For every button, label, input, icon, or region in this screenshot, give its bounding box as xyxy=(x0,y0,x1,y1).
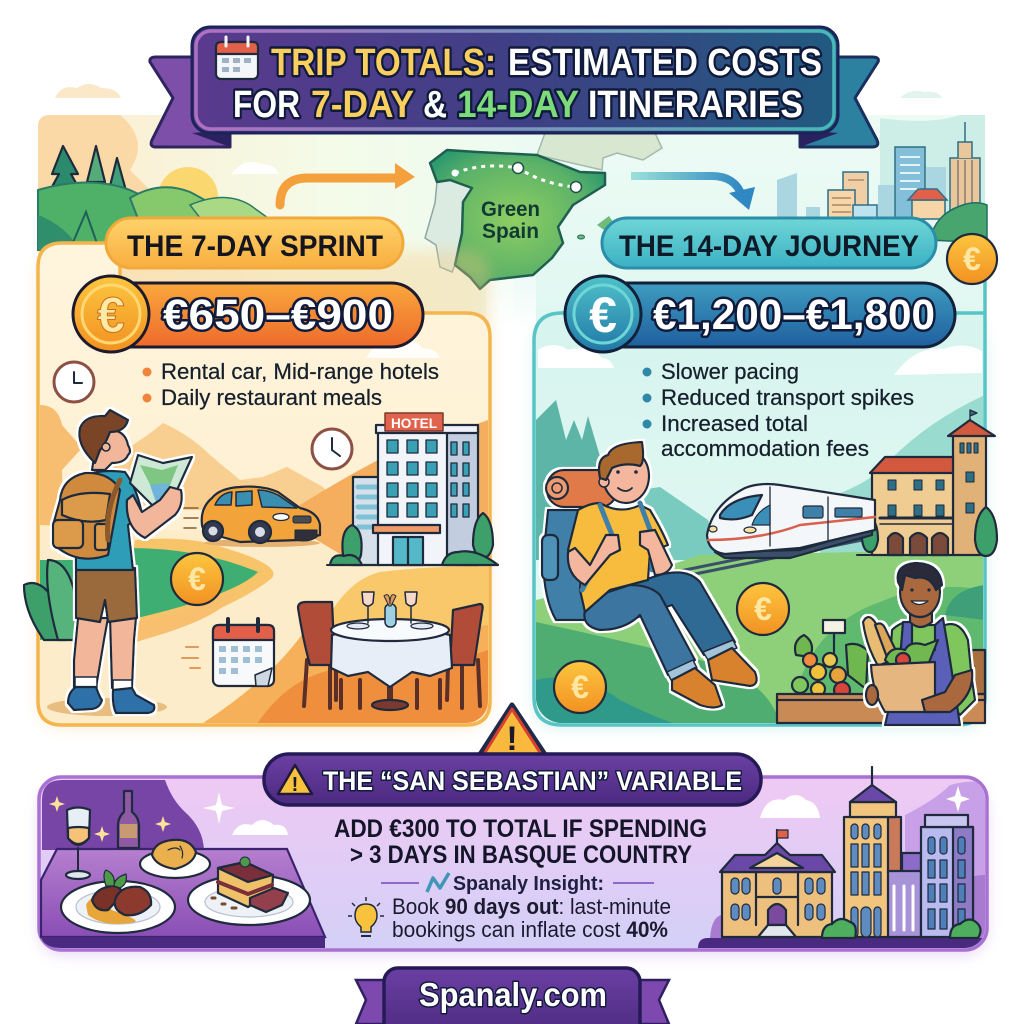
price: 7-day: €650–€900 xyxy=(163,291,393,339)
icon: spanaly logo xyxy=(427,873,449,892)
callout text: Spanaly Insight: xyxy=(453,873,604,895)
spanish building xyxy=(857,410,997,556)
scene: hills xyxy=(40,339,488,727)
pill: 7-day heading xyxy=(106,218,403,268)
bullets: 14-day: Increased total xyxy=(661,411,808,436)
clock xyxy=(54,362,94,402)
warning triangle: ! xyxy=(506,720,518,758)
title banner xyxy=(150,27,878,147)
price: 14-day xyxy=(565,276,955,352)
hills xyxy=(38,182,235,250)
icon: calendar xyxy=(216,37,258,79)
title text: ITINERARIES xyxy=(588,84,803,126)
hotel sign xyxy=(385,413,443,431)
sparkles and clouds xyxy=(232,795,820,835)
callout text: ADD €300 TO TOTAL IF SPENDING xyxy=(334,815,707,843)
bullets: 7-day xyxy=(142,359,439,410)
bread plate xyxy=(140,840,210,878)
coin top right xyxy=(947,234,997,284)
insight text xyxy=(392,894,671,942)
callout text xyxy=(334,815,707,895)
icon: warning: ! xyxy=(292,774,298,796)
background: left scenery xyxy=(38,84,514,330)
panel: 7-day sprint xyxy=(24,218,498,728)
pill: 14-day heading: THE 14-DAY JOURNEY xyxy=(619,230,919,263)
arrow: orange to map xyxy=(280,163,415,205)
map: Green Spain xyxy=(425,133,662,289)
heading pill: THE “SAN SEBASTIAN” VARIABLE xyxy=(323,766,742,796)
background: right scenery xyxy=(486,91,987,330)
coin top right: € xyxy=(963,241,981,277)
car xyxy=(180,487,320,547)
dining table xyxy=(41,791,325,948)
heading pill xyxy=(264,754,761,805)
trees xyxy=(44,146,128,221)
price: 14-day: € xyxy=(589,287,617,343)
panel: 14-day journey xyxy=(534,218,997,728)
curtain xyxy=(42,780,204,850)
arrow: blue from map xyxy=(631,176,755,210)
title text: & xyxy=(423,84,447,126)
hiker with map xyxy=(53,410,192,713)
coin xyxy=(554,661,606,713)
scene: hills xyxy=(536,345,985,725)
price: 7-day xyxy=(73,276,423,352)
bullets: 14-day: Reduced transport spikes xyxy=(661,385,914,410)
warning triangle xyxy=(479,705,546,758)
price: 7-day: € xyxy=(97,287,125,343)
callout text: > 3 DAYS IN BASQUE COUNTRY xyxy=(350,841,692,869)
panel: San Sebastian variable xyxy=(39,705,987,955)
bullets: 14-day: Slower pacing xyxy=(661,359,799,384)
map label: Green xyxy=(481,198,540,221)
market vendor xyxy=(863,563,975,725)
insight text: Book 90 days out: last-minute xyxy=(392,894,671,919)
title text: TRIP TOTALS: xyxy=(271,42,496,84)
icon: warning xyxy=(278,765,312,796)
paper map xyxy=(130,455,192,510)
coin xyxy=(737,583,789,635)
calendar xyxy=(182,619,274,686)
coin: € xyxy=(754,591,772,627)
bottle xyxy=(118,791,139,848)
plant xyxy=(24,560,76,640)
price: 14-day: €1,200–€1,800 xyxy=(653,291,935,339)
pill: 14-day heading xyxy=(602,218,936,268)
icon: light bulb xyxy=(348,897,384,936)
title text: ESTIMATED COSTS xyxy=(508,42,822,84)
bullets: 7-day: Rental car, Mid-range hotels xyxy=(161,359,439,384)
coin: € xyxy=(188,561,206,597)
cake plate xyxy=(188,857,310,925)
market crate with produce xyxy=(777,620,985,723)
hotel: HOTEL xyxy=(391,415,437,431)
title text: 7-DAY xyxy=(311,84,414,126)
hotel xyxy=(327,413,498,565)
title text: FOR xyxy=(233,84,300,126)
map label: Spain xyxy=(482,220,539,243)
coin: € xyxy=(571,669,589,705)
city buildings xyxy=(698,767,985,948)
bullets: 7-day: Daily restaurant meals xyxy=(161,385,382,410)
coin xyxy=(171,553,223,605)
steak plate xyxy=(61,870,175,933)
dining table xyxy=(298,592,483,710)
bullets: 14-day: accommodation fees xyxy=(661,436,869,461)
wine glass xyxy=(66,808,90,879)
Spain shape xyxy=(430,150,605,289)
title text: 14-DAY xyxy=(457,84,579,126)
insight text: bookings can inflate cost 40% xyxy=(392,917,668,942)
pill: 7-day heading: THE 7-DAY SPRINT xyxy=(127,230,383,263)
footer ribbon xyxy=(356,968,669,1024)
title text xyxy=(233,42,822,126)
seated hiker xyxy=(542,442,757,708)
bullets: 14-day xyxy=(642,359,914,461)
train xyxy=(707,484,875,558)
footer text: Spanaly.com xyxy=(419,976,607,1013)
skyline xyxy=(777,122,987,243)
clock 2 xyxy=(312,429,352,469)
